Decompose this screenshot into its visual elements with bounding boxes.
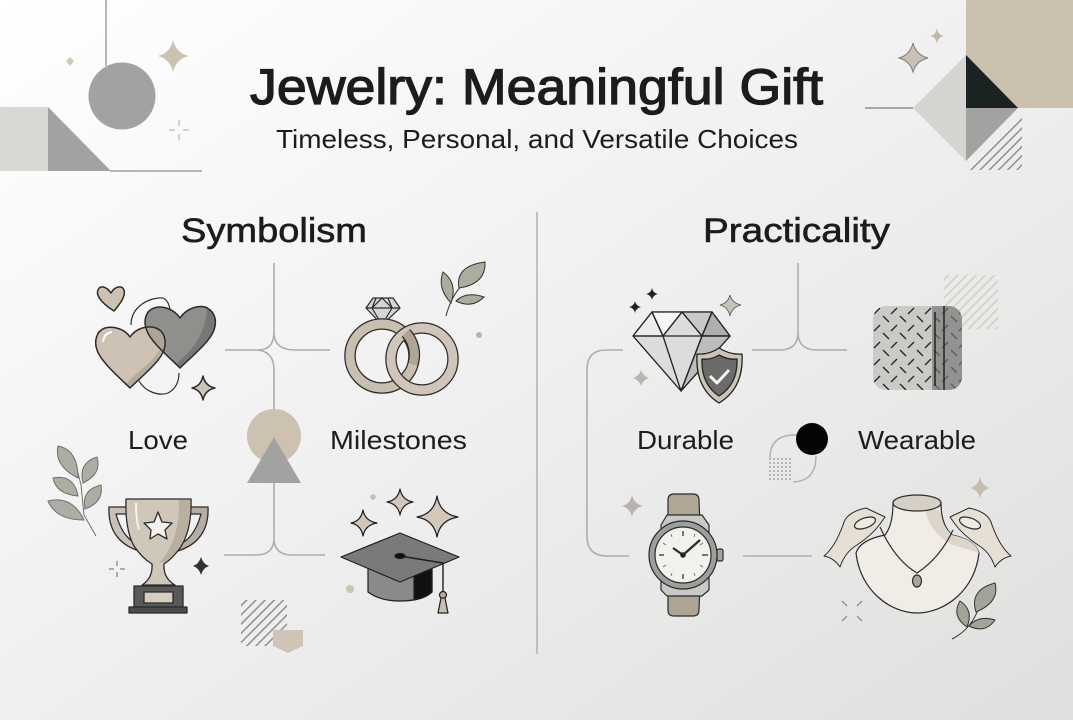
- icon: rings: [350, 298, 453, 390]
- title: Jewelry: Meaningful Gift: [250, 59, 823, 115]
- subtitle: Timeless, Personal, and Versatile Choices: [276, 124, 798, 154]
- icon: diamond plate swatch: [873, 306, 962, 390]
- sparkles: diamond: [629, 288, 741, 386]
- icon: hearts: [96, 287, 215, 400]
- decoration: top-right geometric cluster: [865, 0, 1073, 170]
- icon: diamond with shield: [633, 312, 742, 403]
- heading: symbolism: Symbolism: [181, 212, 367, 250]
- label: durable: Durable: [637, 425, 734, 455]
- decoration: circle and triangle: [247, 409, 301, 483]
- sparkle: necklace burst: [842, 601, 862, 621]
- decoration: top-left geometric cluster: [0, 0, 202, 171]
- icon: leaf sprig bottom: [952, 583, 996, 639]
- icon: leaf sprig top: [441, 262, 485, 316]
- sparkle: necklace star: [970, 477, 990, 498]
- decoration: hatch and tag: [241, 600, 303, 653]
- label: love: Love: [128, 425, 188, 455]
- connector lines: symbolism: [224, 263, 330, 555]
- star: trophy: [193, 557, 209, 575]
- label: wearable: Wearable: [858, 425, 976, 455]
- dots: cap: [346, 494, 376, 593]
- connector lines: practicality: [587, 263, 847, 556]
- icon: trophy: [109, 499, 208, 613]
- icon: watch: [649, 494, 723, 616]
- sparkle: watch: [622, 495, 643, 517]
- heading: practicality: Practicality: [703, 212, 890, 250]
- icon: leaf branch left: [48, 446, 101, 536]
- label: milestones: Milestones: [330, 425, 467, 455]
- decoration: tan hatch: [944, 275, 998, 329]
- icon: necklace on bust with hands: [824, 495, 1011, 613]
- decoration: black dot with arc and dots: [769, 423, 828, 482]
- center divider: [536, 212, 538, 654]
- icon: graduation cap: [341, 489, 459, 613]
- sparkle: trophy: [109, 561, 125, 577]
- panel: practicality: [587, 212, 1011, 639]
- panel: symbolism: [48, 212, 485, 653]
- dot: [476, 332, 482, 338]
